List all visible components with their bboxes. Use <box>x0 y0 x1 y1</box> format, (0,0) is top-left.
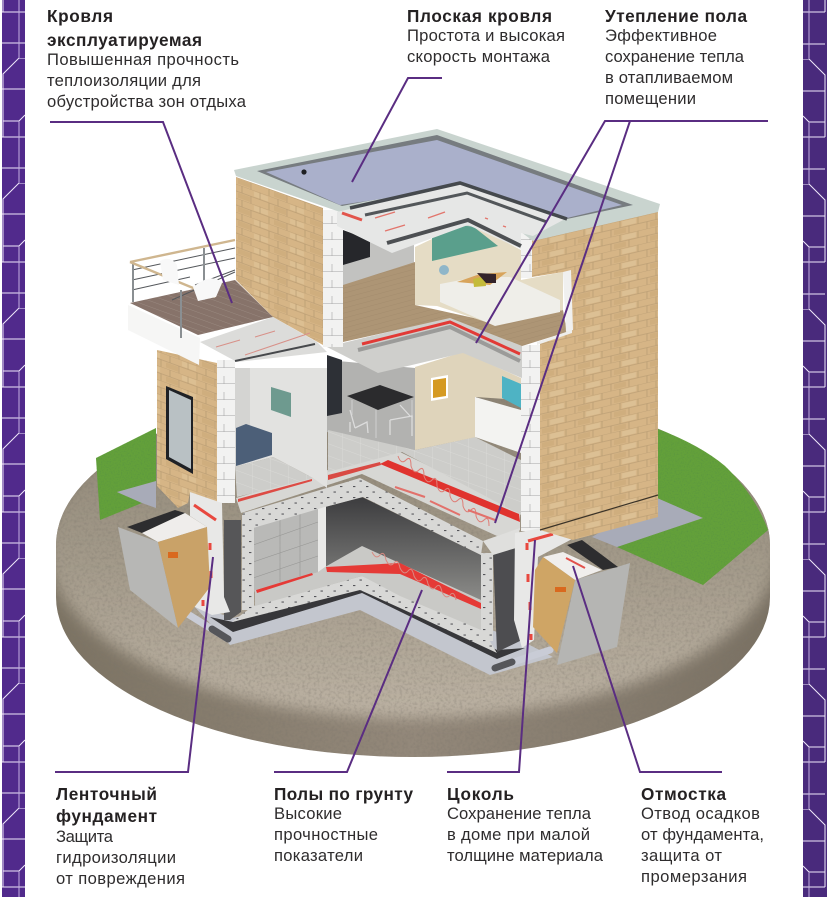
concrete base <box>193 585 553 675</box>
right foundation white top <box>543 552 602 580</box>
callout: плоская кровля: Плоская кровля <box>407 6 552 26</box>
heating loops <box>398 456 489 526</box>
callout: эксплуатируемая кровля: Повышенная прочность <box>47 50 239 69</box>
left dark foundation wall <box>224 520 241 620</box>
right perforated column <box>481 553 493 641</box>
callout: утепление пола: в отапливаемом <box>605 68 733 87</box>
chairs <box>350 405 412 436</box>
roof <box>234 129 660 253</box>
right foundation dark top <box>567 540 618 570</box>
lower left brick wall <box>157 350 217 508</box>
callout: отмостка: промерзания <box>641 867 747 886</box>
ground disc <box>47 378 780 765</box>
block lines <box>253 512 318 582</box>
callout: цоколь: Цоколь <box>447 784 514 804</box>
basement back walls <box>325 497 481 605</box>
white counter <box>475 397 521 453</box>
drainage pipes <box>186 613 550 668</box>
cream wall <box>415 352 521 450</box>
callout: ленточный фундамент: фундамент <box>56 806 157 826</box>
terrace red marks <box>216 331 310 355</box>
upper back wall <box>343 232 414 288</box>
callout: цоколь: толщине материала <box>447 846 604 865</box>
callout: ленточный фундамент: Ленточный <box>56 784 157 804</box>
dark waterproofing strip <box>210 584 525 659</box>
left plinth logos <box>194 505 216 606</box>
callout: цоколь: в доме при малой <box>447 825 590 844</box>
ground floor interior <box>327 352 521 526</box>
left foundation dark top <box>127 510 185 533</box>
upper window <box>343 230 370 265</box>
ground floor slab <box>236 452 520 536</box>
lower left window <box>166 386 193 474</box>
left foundation concrete <box>118 527 178 628</box>
lamp <box>439 265 449 275</box>
callout: полы по грунту: показатели <box>274 846 363 865</box>
wall <box>235 368 327 488</box>
white block column right <box>521 345 540 531</box>
white column right upper <box>521 233 532 278</box>
right plinth logos <box>527 534 553 640</box>
window reveal white <box>563 270 573 332</box>
callout: полы по грунту <box>274 784 413 865</box>
leader lines <box>50 78 768 772</box>
roof membrane <box>266 140 622 218</box>
callout: ленточный фундамент <box>56 784 185 888</box>
callout: утепление пола <box>605 6 747 108</box>
callout: плоская кровля: Простота и высокая <box>407 26 565 45</box>
left OSB board <box>158 527 210 628</box>
house <box>118 129 660 675</box>
white column upper left <box>323 210 343 347</box>
callout: эксплуатируемая кровля <box>47 6 247 111</box>
pillows <box>457 272 507 287</box>
bedroom painting <box>432 224 498 261</box>
callout: отмостка: защита от <box>641 846 722 865</box>
callout: ленточный фундамент: Защита <box>56 827 114 846</box>
back wall grey <box>327 360 415 450</box>
right foundation concrete <box>557 563 630 665</box>
brick shadow line <box>540 495 658 530</box>
left foundation white top <box>142 513 207 542</box>
callout: отмостка <box>641 784 764 886</box>
picture <box>271 387 291 417</box>
callout: полы по грунту: прочностные <box>274 825 378 844</box>
roof layers <box>337 183 567 253</box>
chairs <box>160 259 222 301</box>
right brick wall <box>532 208 658 540</box>
callout: эксплуатируемая кровля: Кровля <box>47 6 113 26</box>
terrace dark line <box>235 344 315 361</box>
callout: отмостка: от фундамента, <box>641 825 764 844</box>
callout: утепление пола: Утепление пола <box>605 6 747 26</box>
callout: ленточный фундамент: от повреждения <box>56 869 185 888</box>
right dark foundation wall <box>493 545 522 652</box>
callout: отмостка: Отвод осадков <box>641 804 760 823</box>
wood floor <box>343 262 567 346</box>
basement heating loops <box>372 552 456 600</box>
painting sunflowers <box>431 375 448 401</box>
basement floor slab <box>255 546 481 630</box>
railing <box>130 240 235 338</box>
callout: плоская кровля: скорость монтажа <box>407 47 551 66</box>
balcony <box>128 240 327 365</box>
upper left brick wall <box>236 177 323 345</box>
window <box>327 355 342 416</box>
callout: полы по грунту: Высокие <box>274 804 342 823</box>
gravel paths <box>117 481 703 547</box>
left plinth panel <box>190 492 230 615</box>
orange drain pipe right <box>555 587 566 592</box>
callout: утепление пола: Эффективное <box>605 26 717 45</box>
basement column <box>318 502 326 578</box>
lower perforated slab <box>232 576 497 653</box>
middle slab <box>327 317 522 378</box>
mat labels <box>395 487 495 520</box>
callout: полы по грунту: Полы по грунту <box>274 784 413 804</box>
parapet <box>234 129 660 241</box>
upper room <box>343 222 567 346</box>
terrace layers <box>200 317 327 362</box>
callout: плоская кровля <box>407 6 565 66</box>
basement red mat <box>256 563 481 609</box>
deck <box>130 280 273 335</box>
sofa <box>236 424 272 466</box>
bedroom wall <box>415 222 563 325</box>
left perforated column <box>242 515 254 610</box>
orange drain pipe left <box>168 552 178 558</box>
callout: утепление пола: помещении <box>605 89 696 108</box>
left decorative purple band <box>2 0 25 897</box>
callout: эксплуатируемая кровля: эксплуатируемая <box>47 30 202 50</box>
red floor mat <box>380 460 520 522</box>
reveal lower <box>537 330 572 345</box>
callout: ленточный фундамент: гидроизоляции <box>56 848 176 867</box>
callout: эксплуатируемая кровля: теплоизоляции для <box>47 71 201 90</box>
roof drain <box>301 169 307 175</box>
tile floor <box>328 430 521 515</box>
callout: утепление пола: сохранение тепла <box>605 47 745 66</box>
dining table <box>347 385 414 438</box>
red line <box>238 479 312 502</box>
callout: цоколь <box>447 784 604 865</box>
roof inner dark <box>257 135 633 223</box>
callout: цоколь: Сохранение тепла <box>447 804 592 823</box>
left ground floor room <box>235 368 327 502</box>
floor <box>235 457 313 497</box>
callout: отмостка: Отмостка <box>641 784 726 804</box>
upper perforated slab <box>243 478 483 555</box>
right decorative purple band <box>803 0 827 897</box>
fascia <box>128 305 200 365</box>
basement block walls <box>253 505 318 592</box>
white block column left <box>217 360 235 503</box>
right plinth panel <box>514 522 574 648</box>
right foundation red labels <box>566 558 585 568</box>
teal backsplash <box>502 376 521 408</box>
corner block <box>483 528 520 555</box>
right OSB board <box>533 557 575 653</box>
wall shade <box>235 368 250 467</box>
grass <box>96 428 768 585</box>
callout: эксплуатируемая кровля: обустройства зон отдыха <box>47 92 247 111</box>
bed <box>440 277 560 326</box>
